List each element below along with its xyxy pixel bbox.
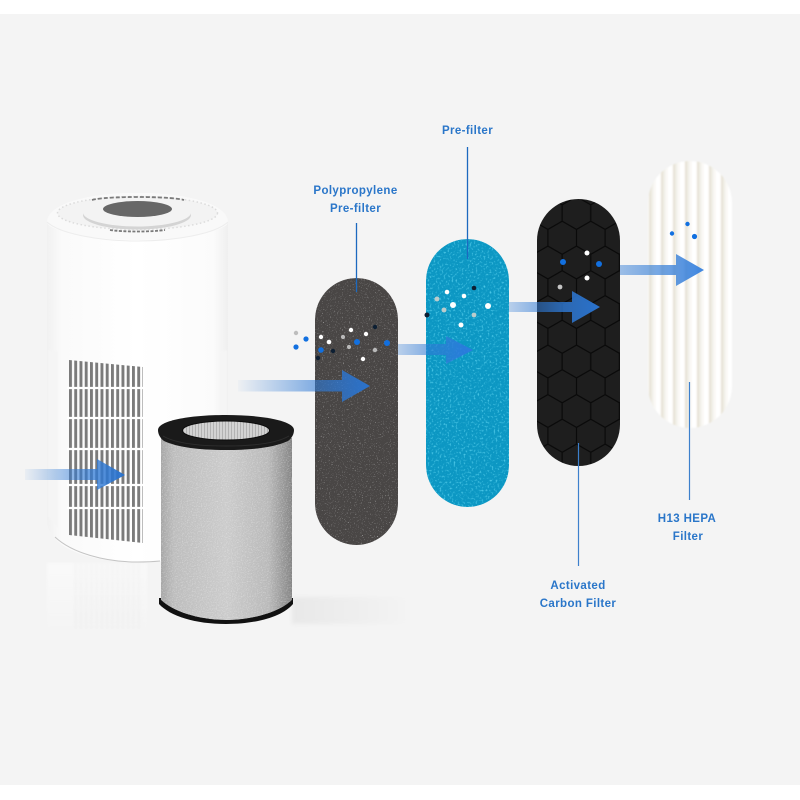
arrow: into HEPA filter bbox=[620, 254, 704, 286]
purifier top with control disc bbox=[47, 193, 228, 241]
label: activated carbon filter bbox=[540, 443, 616, 610]
cartridge shadow bbox=[292, 597, 410, 624]
label: H13 HEPA filter: H13 HEPA bbox=[658, 513, 716, 525]
purifier base edge bbox=[55, 537, 160, 562]
particles bbox=[558, 250, 602, 289]
replacement filter cartridge bbox=[158, 415, 294, 624]
panel: H13 HEPA filter bbox=[648, 161, 732, 428]
label: activated carbon filter: Carbon Filter bbox=[540, 598, 616, 610]
purifier body bbox=[47, 193, 228, 562]
cartridge body bbox=[161, 438, 292, 620]
air purifier unit bbox=[47, 193, 228, 635]
side vents bbox=[48, 350, 227, 528]
arrow: into carbon filter bbox=[509, 291, 600, 323]
arrow: into blue pre-filter bbox=[398, 336, 473, 364]
arrow: into purifier bbox=[25, 459, 125, 490]
label: H13 HEPA filter: Filter bbox=[673, 531, 703, 543]
panel: blue pre-filter bbox=[424, 239, 509, 507]
label: pre-filter: Pre-filter bbox=[442, 125, 493, 137]
cartridge inner pleats bbox=[182, 421, 270, 440]
particles bbox=[670, 222, 697, 239]
cartridge top rim bbox=[158, 415, 294, 450]
label: pre-filter bbox=[442, 125, 493, 259]
label: polypropylene pre-filter: Polypropylene bbox=[313, 185, 398, 197]
arrow: into polypropylene pre-filter bbox=[238, 370, 370, 402]
label: activated carbon filter: Activated bbox=[550, 580, 606, 592]
cartridge bottom rim bbox=[159, 598, 293, 624]
label: polypropylene pre-filter bbox=[313, 185, 398, 292]
particles bbox=[293, 325, 390, 361]
panel: polypropylene pre-filter bbox=[293, 278, 398, 545]
particles bbox=[424, 286, 491, 328]
purifier reflection bbox=[47, 563, 147, 635]
front air grill bbox=[67, 360, 145, 543]
label: H13 HEPA filter bbox=[658, 382, 716, 543]
panel: activated carbon filter bbox=[537, 199, 620, 466]
label: polypropylene pre-filter: Pre-filter bbox=[330, 203, 381, 215]
